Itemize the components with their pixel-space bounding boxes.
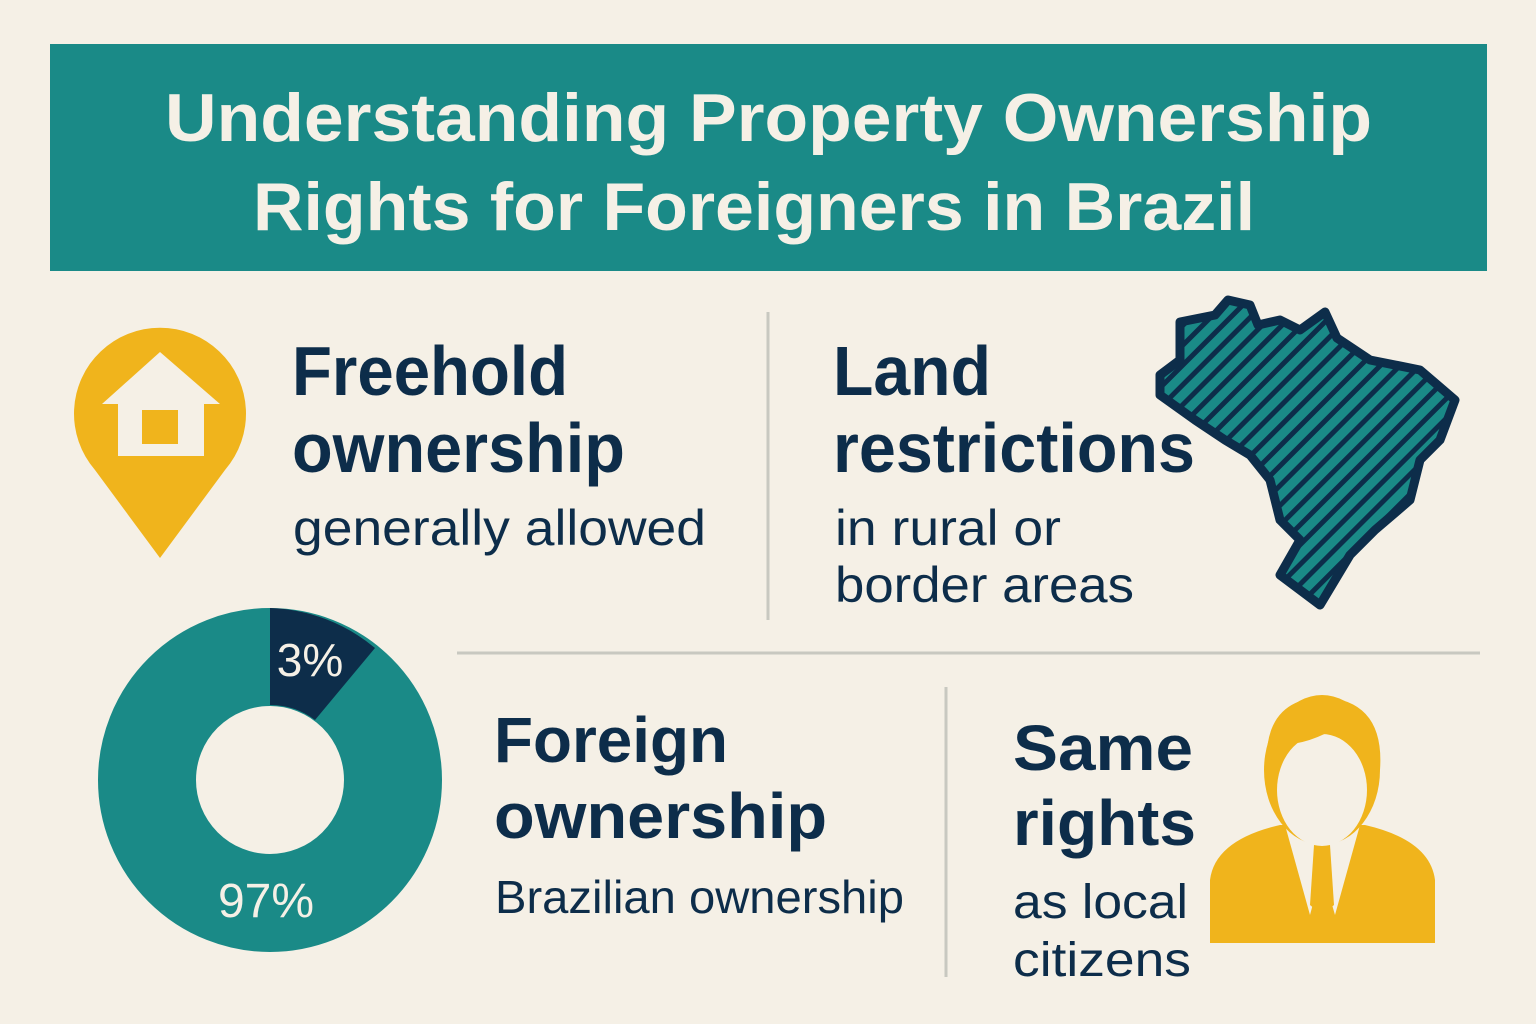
text: freehold ownership (292, 332, 706, 556)
text: land restrictions: border areas (835, 557, 1134, 613)
text: land restrictions: restrictions (833, 409, 1195, 487)
text: foreign ownership (494, 704, 904, 923)
text: same rights: Same (1013, 712, 1193, 784)
donut chart: 3% (277, 634, 343, 686)
icon: person (1210, 695, 1435, 943)
text: land restrictions: in rural or (835, 500, 1061, 556)
title banner (50, 44, 1487, 271)
donut chart (147, 608, 393, 928)
icon: location pin with house (74, 328, 246, 558)
title banner: Understanding Property Ownership (165, 80, 1372, 156)
text: land restrictions: Land (833, 332, 991, 410)
text: foreign ownership: Brazilian ownership (495, 871, 904, 923)
text: same rights: citizens (1013, 934, 1191, 987)
text: freehold ownership: ownership (292, 409, 625, 487)
text: foreign ownership: ownership (494, 780, 827, 852)
icon: Brazil map (1160, 300, 1455, 605)
text: freehold ownership: generally allowed (293, 500, 706, 556)
text: same rights (1013, 712, 1196, 987)
text: same rights: as local (1013, 876, 1188, 929)
title banner: Rights for Foreigners in Brazil (253, 169, 1255, 245)
text: freehold ownership: Freehold (292, 332, 568, 410)
text: same rights: rights (1013, 787, 1196, 859)
text: land restrictions (833, 332, 1195, 613)
text: foreign ownership: Foreign (494, 704, 728, 776)
donut chart: 97% (218, 875, 314, 928)
